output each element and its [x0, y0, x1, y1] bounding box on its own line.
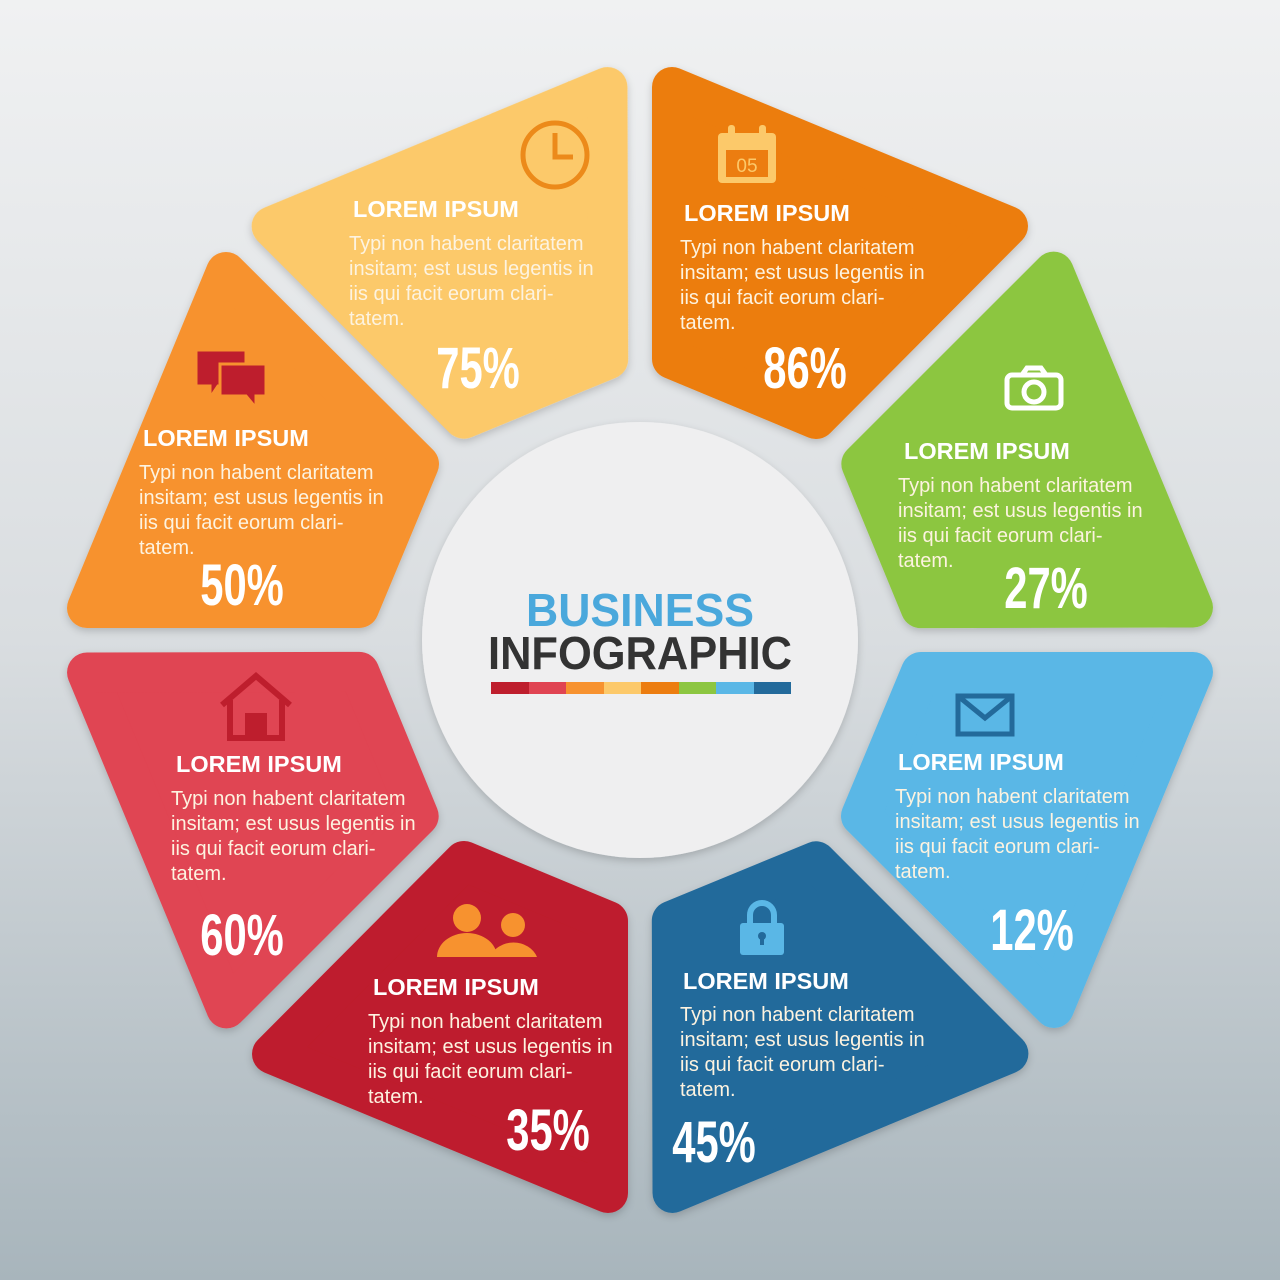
icon: clock: [523, 123, 587, 187]
panel text: green: iis qui facit eorum clari-: [898, 525, 1103, 547]
panel text: yellow: [349, 123, 594, 401]
segment: crimson (35%): [272, 861, 608, 1193]
panel text: green: LOREM IPSUM: [904, 438, 1070, 464]
panel text: light orange: tatem.: [139, 537, 195, 559]
panel text: dark blue: insitam; est usus legentis in: [680, 1029, 925, 1051]
panel text: light blue: LOREM IPSUM: [898, 749, 1064, 775]
icon: lock: [740, 903, 784, 955]
panel text: yellow: insitam; est usus legentis in: [349, 258, 594, 280]
panel text: yellow: LOREM IPSUM: [353, 196, 519, 222]
segment: green (27%): [819, 272, 1280, 744]
panel text: light blue: 12%: [990, 897, 1074, 963]
panel text: red: iis qui facit eorum clari-: [171, 838, 376, 860]
panel text: dark blue: LOREM IPSUM: [683, 968, 849, 994]
title: INFOGRAPHIC: INFOGRAPHIC: [488, 627, 792, 679]
segment: red (60%): [0, 536, 461, 1008]
panel text: light blue: iis qui facit eorum clari-: [895, 836, 1100, 858]
icon: envelope: [958, 696, 1012, 734]
title: BUSINESS: BUSINESS: [526, 584, 754, 636]
panel text: light orange: Typi non habent claritatem: [139, 462, 374, 484]
panel text: red: insitam; est usus legentis in: [171, 813, 416, 835]
icon: house: [222, 676, 290, 738]
segment: dark blue (45%): [536, 819, 1008, 1280]
panel text: dark blue: Typi non habent claritatem: [680, 1004, 915, 1026]
panel text: crimson: iis qui facit eorum clari-: [368, 1061, 573, 1083]
panel text: orange: iis qui facit eorum clari-: [680, 287, 885, 309]
panel text: orange: LOREM IPSUM: [684, 200, 850, 226]
panel text: red: [171, 676, 416, 968]
panel text: green: insitam; est usus legentis in: [898, 500, 1143, 522]
panel text: yellow: 75%: [436, 335, 520, 401]
segment: light blue (12%): [861, 672, 1193, 1008]
panel text: red: LOREM IPSUM: [176, 751, 342, 777]
segment: orange (86%): [672, 87, 1008, 419]
panel text: green: Typi non habent claritatem: [898, 475, 1133, 497]
panel text: green: 27%: [1004, 555, 1088, 621]
icon: people: [437, 904, 537, 957]
panel text: orange: 86%: [763, 335, 847, 401]
color bar: [491, 682, 791, 694]
panel text: light orange: insitam; est usus legentis in: [139, 487, 384, 509]
segment: light orange (50%): [87, 272, 419, 608]
panel text: dark blue: [672, 903, 925, 1175]
panel text: green: [898, 368, 1143, 621]
panel text: light blue: [895, 696, 1140, 963]
panel text: light orange: 50%: [200, 552, 284, 618]
panel text: orange: insitam; est usus legentis in: [680, 262, 925, 284]
panel text: light blue: tatem.: [895, 861, 951, 883]
icon: camera: [1007, 368, 1061, 408]
panel text: dark blue: 45%: [672, 1109, 756, 1175]
panel text: crimson: tatem.: [368, 1086, 424, 1108]
panel text: yellow: Typi non habent claritatem: [349, 233, 584, 255]
icon: calendar: 05: [736, 156, 758, 177]
icon: chat bubbles: [196, 350, 266, 408]
center circle: [422, 422, 858, 858]
panel text: red: tatem.: [171, 863, 227, 885]
panel text: dark blue: tatem.: [680, 1079, 736, 1101]
segment: yellow (75%): [272, 0, 744, 461]
panel text: yellow: tatem.: [349, 308, 405, 330]
panel text: orange: Typi non habent claritatem: [680, 237, 915, 259]
panel text: green: tatem.: [898, 550, 954, 572]
panel text: yellow: iis qui facit eorum clari-: [349, 283, 554, 305]
panel text: crimson: insitam; est usus legentis in: [368, 1036, 613, 1058]
panel text: orange: tatem.: [680, 312, 736, 334]
panel text: red: Typi non habent claritatem: [171, 788, 406, 810]
panel text: light blue: insitam; est usus legentis in: [895, 811, 1140, 833]
panel text: light orange: iis qui facit eorum clari-: [139, 512, 344, 534]
panel text: orange: [680, 125, 925, 401]
icon: calendar: [718, 125, 776, 183]
panel text: light orange: [139, 350, 384, 618]
panel text: dark blue: iis qui facit eorum clari-: [680, 1054, 885, 1076]
panel text: crimson: Typi non habent claritatem: [368, 1011, 603, 1033]
panel text: red: 60%: [200, 902, 284, 968]
panel text: crimson: 35%: [506, 1097, 590, 1163]
panel text: light blue: Typi non habent claritatem: [895, 786, 1130, 808]
panel text: crimson: [368, 904, 613, 1163]
panel text: crimson: LOREM IPSUM: [373, 974, 539, 1000]
panel text: light orange: LOREM IPSUM: [143, 425, 309, 451]
